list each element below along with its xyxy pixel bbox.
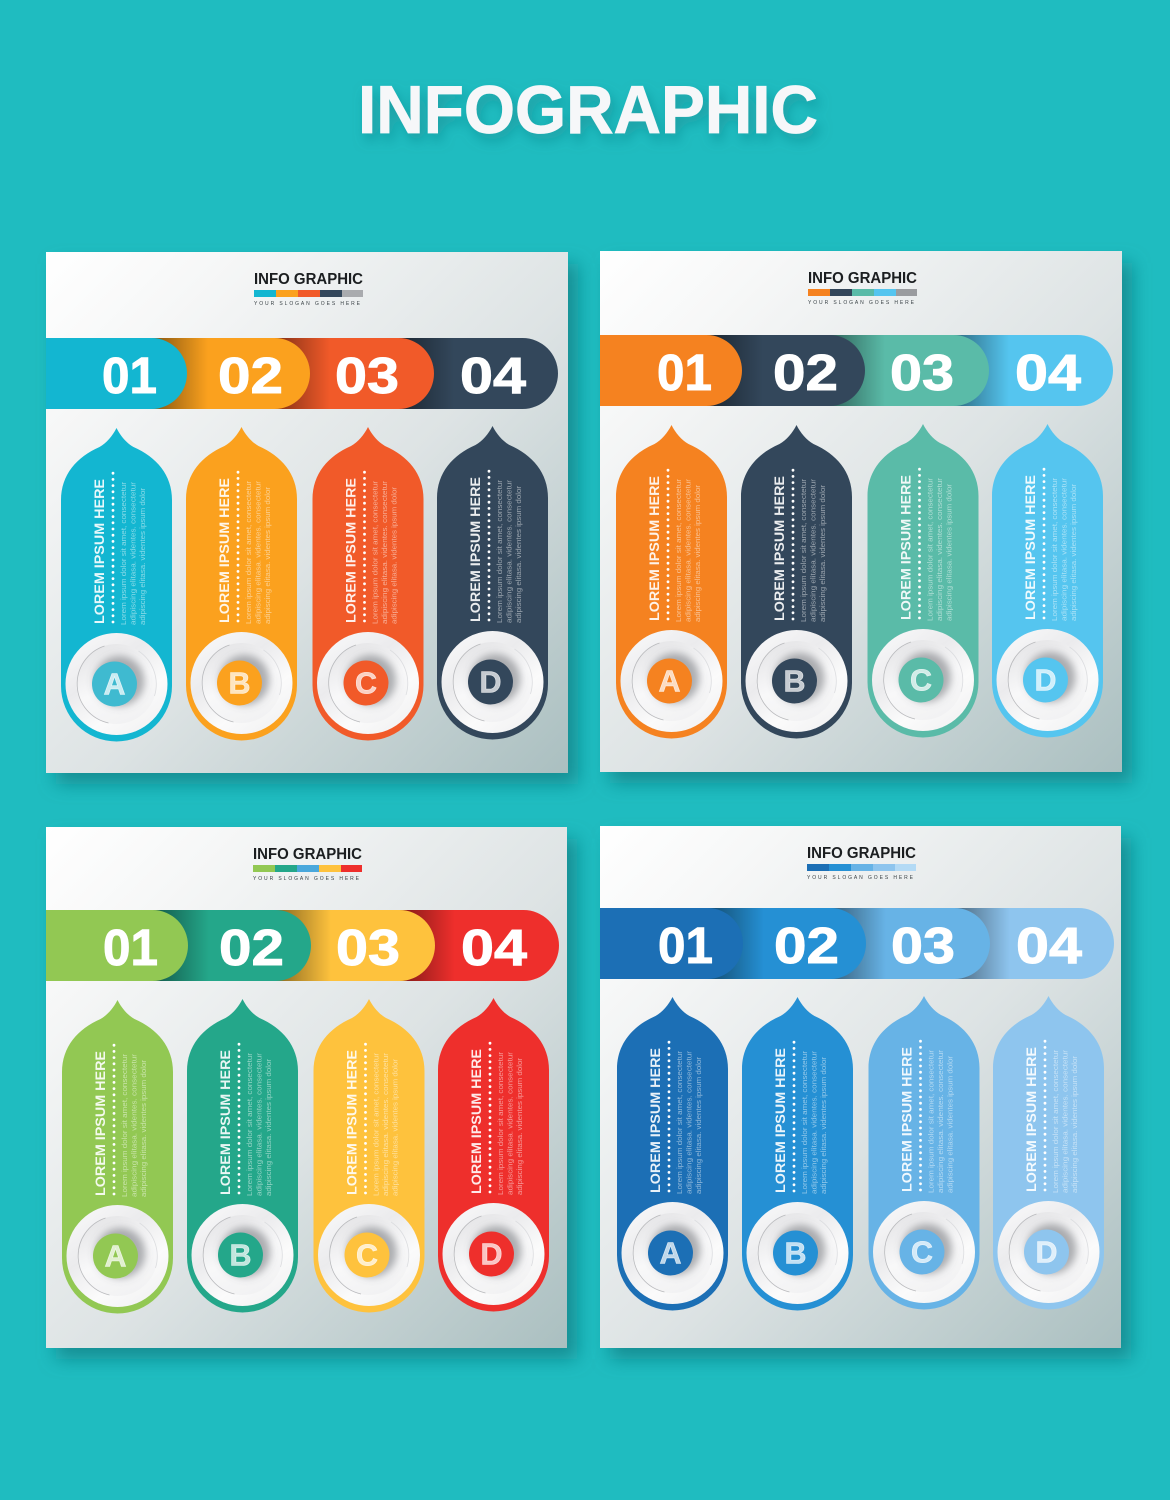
column C xyxy=(314,999,424,1312)
column B: adipiscing elitasa. videntes ipsum dolor xyxy=(818,484,827,622)
number band xyxy=(46,910,559,981)
panel header: YOUR SLOGAN GOES HERE xyxy=(808,300,915,306)
column D: adipiscing elitasa. videntes. consectetur xyxy=(506,1051,514,1195)
column D xyxy=(437,426,548,740)
number band: 02 xyxy=(218,347,283,404)
column B: adipiscing elitasa. videntes ipsum dolor xyxy=(819,1056,828,1194)
column C: Lorem ipsum dolor sit amet, consectetur xyxy=(926,477,934,621)
column D: LOREM IPSUM HERE xyxy=(467,477,483,622)
column D: adipiscing elitasa. videntes ipsum dolor xyxy=(514,485,523,623)
number band: 01 xyxy=(657,344,712,401)
column C xyxy=(868,424,978,738)
column C: adipiscing elitasa. videntes ipsum dolor xyxy=(944,483,954,621)
column A: adipiscing elitasa. videntes ipsum dolor xyxy=(138,487,147,625)
column B xyxy=(186,427,297,741)
column A: adipiscing elitasa. videntes ipsum dolor xyxy=(693,484,702,622)
column A: Lorem ipsum dolor sit amet, consectetur xyxy=(119,481,128,625)
column A: adipiscing elitasa. videntes. consectetur xyxy=(130,1053,138,1197)
panel header: INFO GRAPHIC xyxy=(807,845,916,862)
panel header: INFO GRAPHIC xyxy=(253,846,362,863)
column B: B xyxy=(783,664,806,698)
panel: top left xyxy=(46,252,578,784)
column A: adipiscing elitasa. videntes. consectetur xyxy=(128,481,138,625)
panel: top right xyxy=(600,251,1132,783)
column C: adipiscing elitasa. videntes. consectetur xyxy=(936,1049,945,1193)
column B: Lorem ipsum dolor sit amet, consectetur xyxy=(245,1052,254,1196)
column C: LOREM IPSUM HERE xyxy=(898,475,914,620)
column B: Lorem ipsum dolor sit amet, consectetur xyxy=(244,480,253,624)
column D xyxy=(993,996,1104,1310)
column B: LOREM IPSUM HERE xyxy=(772,1048,788,1193)
column B: adipiscing elitasa. videntes. consectetur xyxy=(254,480,262,624)
column B: adipiscing elitasa. videntes. consectetur xyxy=(810,1050,818,1194)
column A: adipiscing elitasa. videntes. consectetur xyxy=(684,1050,694,1194)
column A: Lorem ipsum dolor sit amet, consectetur xyxy=(120,1053,129,1197)
column B: B xyxy=(784,1236,807,1270)
column C: LOREM IPSUM HERE xyxy=(344,1050,360,1195)
column A: adipiscing elitasa. videntes ipsum dolor xyxy=(694,1056,703,1194)
number band: 04 xyxy=(1015,344,1082,401)
panel: bottom right xyxy=(600,826,1131,1359)
column C: adipiscing elitasa. videntes. consectetur xyxy=(381,1052,390,1196)
column C: C xyxy=(356,1238,378,1272)
column C: adipiscing elitasa. videntes ipsum dolor xyxy=(390,1058,400,1196)
panel header: INFO GRAPHIC xyxy=(254,271,363,288)
number band xyxy=(600,908,1114,979)
column C: adipiscing elitasa. videntes. consectetur xyxy=(380,480,389,624)
column B: adipiscing elitasa. videntes ipsum dolor xyxy=(263,486,272,624)
number band: 04 xyxy=(461,919,528,976)
number band xyxy=(600,335,1113,406)
number band: 03 xyxy=(891,917,955,974)
column A: adipiscing elitasa. videntes ipsum dolor xyxy=(139,1059,148,1197)
panel header xyxy=(807,845,916,881)
panel: bottom left xyxy=(46,827,577,1359)
column B: Lorem ipsum dolor sit amet, consectetur xyxy=(799,478,808,622)
column B: adipiscing elitasa. videntes ipsum dolor xyxy=(264,1058,273,1196)
column C: C xyxy=(355,666,377,700)
column D: LOREM IPSUM HERE xyxy=(468,1049,484,1194)
column D: LOREM IPSUM HERE xyxy=(1022,475,1038,620)
column A xyxy=(62,1000,173,1314)
panel header xyxy=(254,271,363,307)
column A xyxy=(617,997,728,1310)
column D: Lorem ipsum dolor sit amet, consectetur xyxy=(1051,1049,1060,1193)
column D: adipiscing elitasa. videntes ipsum dolor xyxy=(515,1057,524,1195)
column B: LOREM IPSUM HERE xyxy=(771,476,787,621)
number band: 02 xyxy=(219,919,284,976)
panel header: YOUR SLOGAN GOES HERE xyxy=(254,301,361,307)
column B xyxy=(742,997,853,1310)
number band: 02 xyxy=(774,917,839,974)
column C xyxy=(312,427,424,741)
column B xyxy=(741,425,852,739)
column A: adipiscing elitasa. videntes. consectetur xyxy=(684,478,692,622)
column C: C xyxy=(911,1236,933,1270)
panel header xyxy=(253,846,362,882)
column B: LOREM IPSUM HERE xyxy=(216,478,232,623)
column A: LOREM IPSUM HERE xyxy=(92,1051,108,1196)
column C: LOREM IPSUM HERE xyxy=(898,1047,914,1192)
column C: Lorem ipsum dolor sit amet, consectetur xyxy=(372,1052,380,1196)
panel header xyxy=(808,270,917,306)
column D: adipiscing elitasa. videntes. consectetur xyxy=(504,479,514,623)
column A: LOREM IPSUM HERE xyxy=(91,479,107,624)
column A xyxy=(61,428,172,742)
column D: D xyxy=(1034,664,1057,698)
column D: adipiscing elitasa. videntes. consectetur xyxy=(1060,477,1068,621)
column A: Lorem ipsum dolor sit amet, consectetur xyxy=(674,478,683,622)
column A xyxy=(616,425,727,739)
column D: LOREM IPSUM HERE xyxy=(1023,1047,1039,1192)
title: INFOGRAPHIC xyxy=(358,72,818,148)
column D: D xyxy=(480,1238,503,1272)
number band: 01 xyxy=(103,919,158,976)
column D: Lorem ipsum dolor sit amet, consectetur xyxy=(496,1051,505,1195)
column C: Lorem ipsum dolor sit amet, consectetur xyxy=(370,480,380,624)
column B: adipiscing elitasa. videntes. consectetur xyxy=(808,478,818,622)
column A: LOREM IPSUM HERE xyxy=(646,476,662,621)
column A: A xyxy=(658,664,681,698)
column D xyxy=(438,998,549,1312)
column B: LOREM IPSUM HERE xyxy=(217,1050,233,1195)
number band: 01 xyxy=(102,347,157,404)
column B: B xyxy=(229,1238,252,1272)
number band: 02 xyxy=(773,344,838,401)
column D: adipiscing elitasa. videntes ipsum dolor xyxy=(1069,483,1078,621)
column C: adipiscing elitasa. videntes ipsum dolor xyxy=(390,486,398,624)
panel header: YOUR SLOGAN GOES HERE xyxy=(807,875,914,881)
number band: 01 xyxy=(658,917,713,974)
column D xyxy=(992,424,1103,738)
column D: Lorem ipsum dolor sit amet, consectetur xyxy=(1050,477,1059,621)
number band: 03 xyxy=(890,344,954,401)
column B: adipiscing elitasa. videntes. consectetur xyxy=(254,1052,264,1196)
column A: A xyxy=(103,668,126,702)
column C: Lorem ipsum dolor sit amet, consectetur xyxy=(926,1049,936,1193)
column B: Lorem ipsum dolor sit amet, consectetur xyxy=(800,1050,809,1194)
column A: Lorem ipsum dolor sit amet, consectetur xyxy=(675,1050,684,1194)
number band: 03 xyxy=(336,919,400,976)
column A: A xyxy=(659,1236,682,1270)
column D: adipiscing elitasa. videntes. consectetur xyxy=(1060,1049,1070,1193)
panel header: YOUR SLOGAN GOES HERE xyxy=(253,876,360,882)
column C xyxy=(868,996,980,1310)
column A: LOREM IPSUM HERE xyxy=(647,1048,663,1193)
column D: D xyxy=(1035,1236,1058,1270)
column D: D xyxy=(479,666,502,700)
number band xyxy=(46,338,558,409)
column D: Lorem ipsum dolor sit amet, consectetur xyxy=(495,479,504,623)
column C: adipiscing elitasa. videntes. consectetur xyxy=(935,477,944,621)
column D: adipiscing elitasa. videntes ipsum dolor xyxy=(1070,1055,1079,1193)
panel header: INFO GRAPHIC xyxy=(808,270,917,287)
number band: 03 xyxy=(335,347,399,404)
number band: 04 xyxy=(460,347,527,404)
number band: 04 xyxy=(1016,917,1083,974)
column C: C xyxy=(910,664,932,698)
column C: adipiscing elitasa. videntes ipsum dolor xyxy=(946,1055,954,1193)
column B xyxy=(187,999,298,1312)
column C: LOREM IPSUM HERE xyxy=(342,478,358,623)
column B: B xyxy=(228,666,251,700)
column A: A xyxy=(104,1240,127,1274)
